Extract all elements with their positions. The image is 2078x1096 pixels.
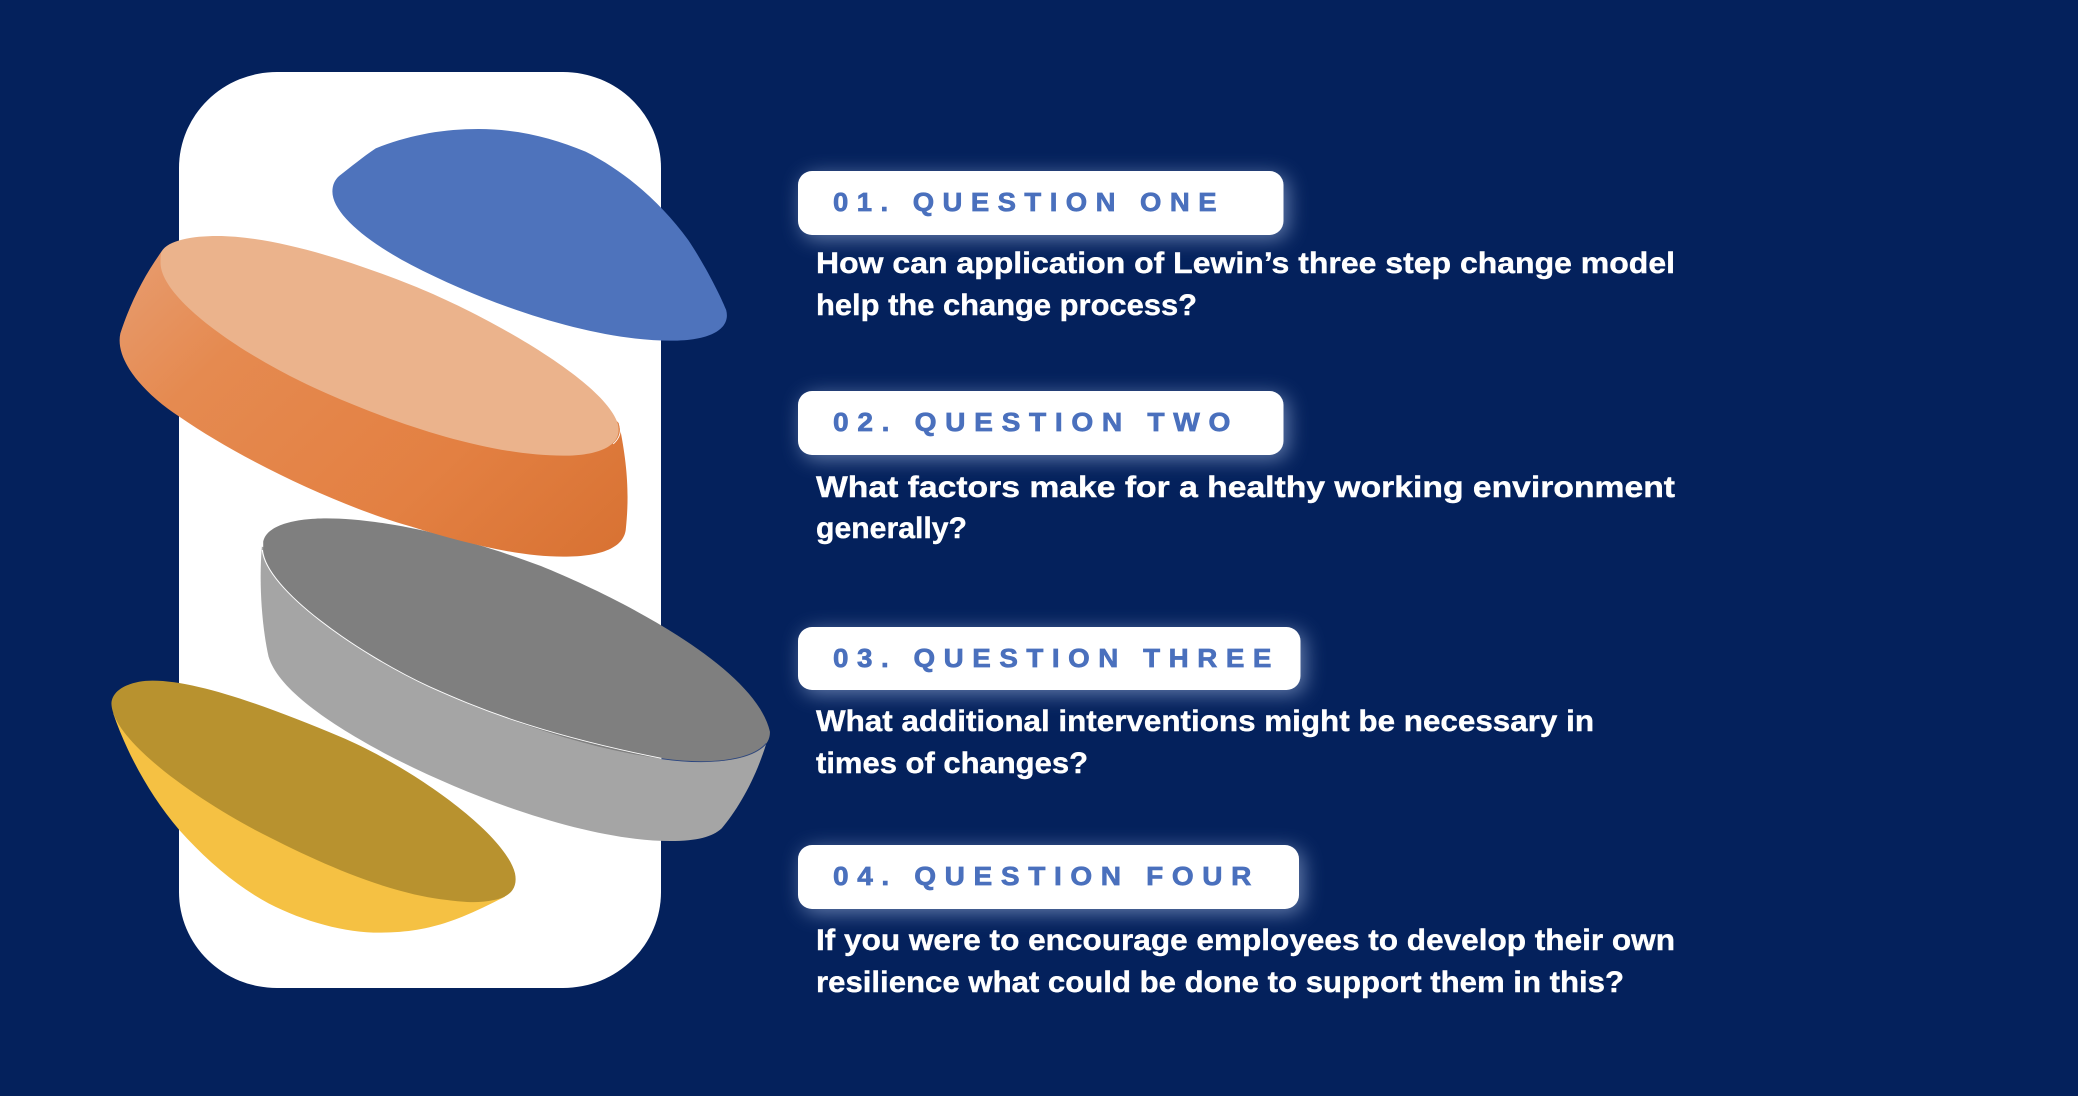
question three block bbox=[798, 627, 1594, 780]
question four text: resilience what could be done to support them in this? bbox=[816, 966, 1624, 999]
question two text: generally? bbox=[816, 512, 967, 545]
illustration: orange disc bbox=[120, 236, 628, 557]
question one text: help the change process? bbox=[816, 289, 1197, 322]
question three text: times of changes? bbox=[816, 747, 1088, 780]
label pill: question three bbox=[798, 627, 1300, 690]
question four text: If you were to encourage employees to develop their own bbox=[816, 924, 1675, 957]
label pill: question three: 03. QUESTION THREE bbox=[833, 643, 1280, 673]
label pill: question one: 01. QUESTION ONE bbox=[833, 187, 1225, 217]
label pill: question two bbox=[798, 391, 1284, 455]
question three text bbox=[816, 705, 1594, 780]
label pill: question one bbox=[798, 171, 1284, 235]
label pill: question four: 04. QUESTION FOUR bbox=[833, 861, 1260, 891]
question one block bbox=[798, 171, 1675, 322]
illustration: gray disc bbox=[261, 518, 770, 841]
question four text bbox=[816, 924, 1675, 999]
question four block bbox=[798, 845, 1675, 999]
illustration: yellow disc bbox=[111, 681, 516, 933]
question one text bbox=[816, 247, 1675, 322]
question two text: What factors make for a healthy working environment bbox=[816, 471, 1675, 504]
question two text bbox=[816, 471, 1675, 545]
label pill: question two: 02. QUESTION TWO bbox=[833, 407, 1239, 437]
panel: white rounded card bbox=[179, 72, 661, 988]
label pill: question four bbox=[798, 845, 1299, 909]
question two block bbox=[798, 391, 1675, 545]
question three text: What additional interventions might be necessary in bbox=[816, 705, 1594, 738]
question one text: How can application of Lewin’s three step change model bbox=[816, 247, 1675, 280]
illustration: blue disc bbox=[332, 129, 727, 341]
